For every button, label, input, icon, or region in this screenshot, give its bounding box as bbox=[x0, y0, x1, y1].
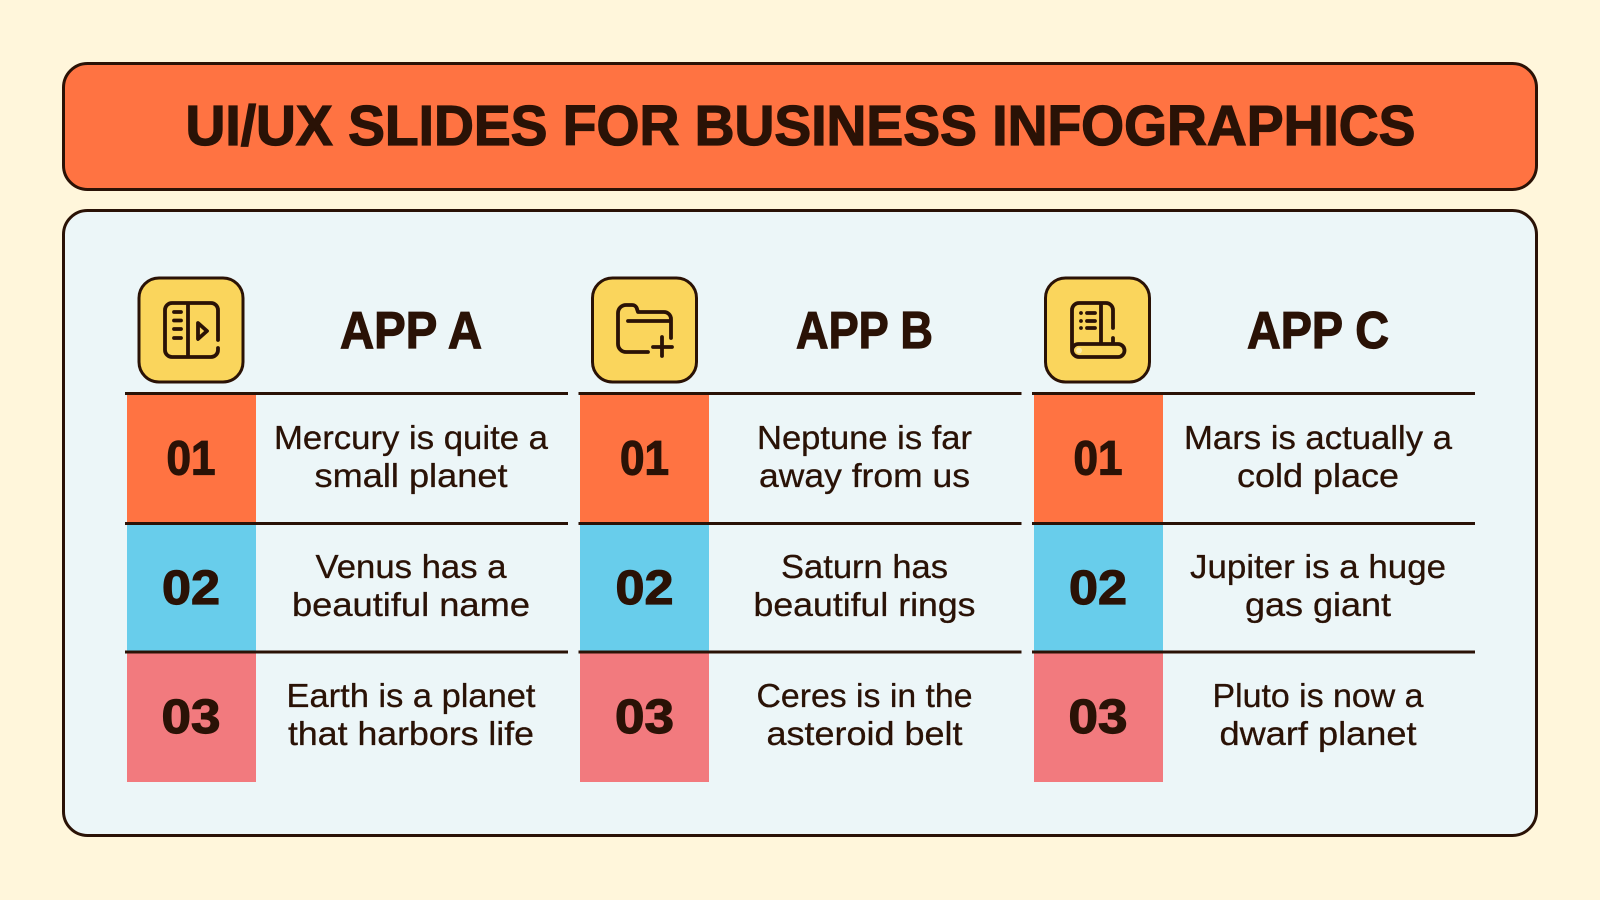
heading: App C: APP C bbox=[1247, 302, 1389, 360]
column: App A bbox=[125, 278, 568, 782]
row 01: Neptune is far bbox=[757, 419, 972, 456]
row 01: 01 bbox=[166, 432, 216, 486]
column: App B bbox=[578, 278, 1022, 782]
row 01: cold place bbox=[1237, 457, 1399, 494]
row 02 bbox=[1034, 525, 1446, 651]
row 03: Pluto is now a bbox=[1212, 677, 1424, 714]
row 03 bbox=[580, 654, 972, 782]
row 02 bbox=[127, 525, 530, 651]
row 03: 03 bbox=[162, 691, 220, 744]
row 01: Mars is actually a bbox=[1184, 419, 1453, 456]
icon: video book bbox=[139, 278, 243, 382]
row 01 bbox=[1034, 395, 1453, 522]
row 01: small planet bbox=[314, 457, 508, 494]
row 02: 02 bbox=[1069, 562, 1127, 615]
row 02: Saturn has bbox=[781, 548, 948, 585]
row 01 bbox=[580, 395, 972, 522]
row 02: beautiful rings bbox=[754, 586, 976, 623]
row 01: 01 bbox=[620, 432, 669, 486]
row 03: dwarf planet bbox=[1220, 715, 1416, 752]
title banner bbox=[64, 64, 1536, 190]
row 02: gas giant bbox=[1245, 586, 1391, 623]
row 03 bbox=[1034, 654, 1424, 782]
row 02: 02 bbox=[616, 562, 674, 615]
row 02: 02 bbox=[162, 562, 220, 615]
row 03: 03 bbox=[615, 691, 674, 744]
column: App C bbox=[1032, 278, 1475, 782]
row 01 bbox=[127, 395, 549, 522]
icon: scroll bbox=[1046, 278, 1150, 382]
panel: app comparison bbox=[64, 210, 1536, 836]
row 02: Jupiter is a huge bbox=[1190, 548, 1446, 585]
row 03: asteroid belt bbox=[766, 715, 962, 752]
heading: App B: APP B bbox=[796, 302, 933, 360]
title: UI/UX SLIDES FOR BUSINESS INFOGRAPHICS bbox=[186, 94, 1416, 158]
row 03: Earth is a planet bbox=[286, 677, 536, 714]
heading: App A: APP A bbox=[340, 302, 482, 360]
row 03: Ceres is in the bbox=[756, 677, 972, 714]
row 03 bbox=[127, 654, 536, 782]
row 01: 01 bbox=[1074, 432, 1122, 486]
row 03: 03 bbox=[1068, 691, 1128, 744]
row 02: Venus has a bbox=[316, 548, 507, 585]
row 01: Mercury is quite a bbox=[274, 419, 549, 456]
row 02 bbox=[580, 525, 976, 651]
row 01: away from us bbox=[759, 457, 970, 494]
row 03: that harbors life bbox=[288, 715, 534, 752]
icon: folder plus bbox=[592, 278, 696, 382]
row 02: beautiful name bbox=[292, 586, 530, 623]
